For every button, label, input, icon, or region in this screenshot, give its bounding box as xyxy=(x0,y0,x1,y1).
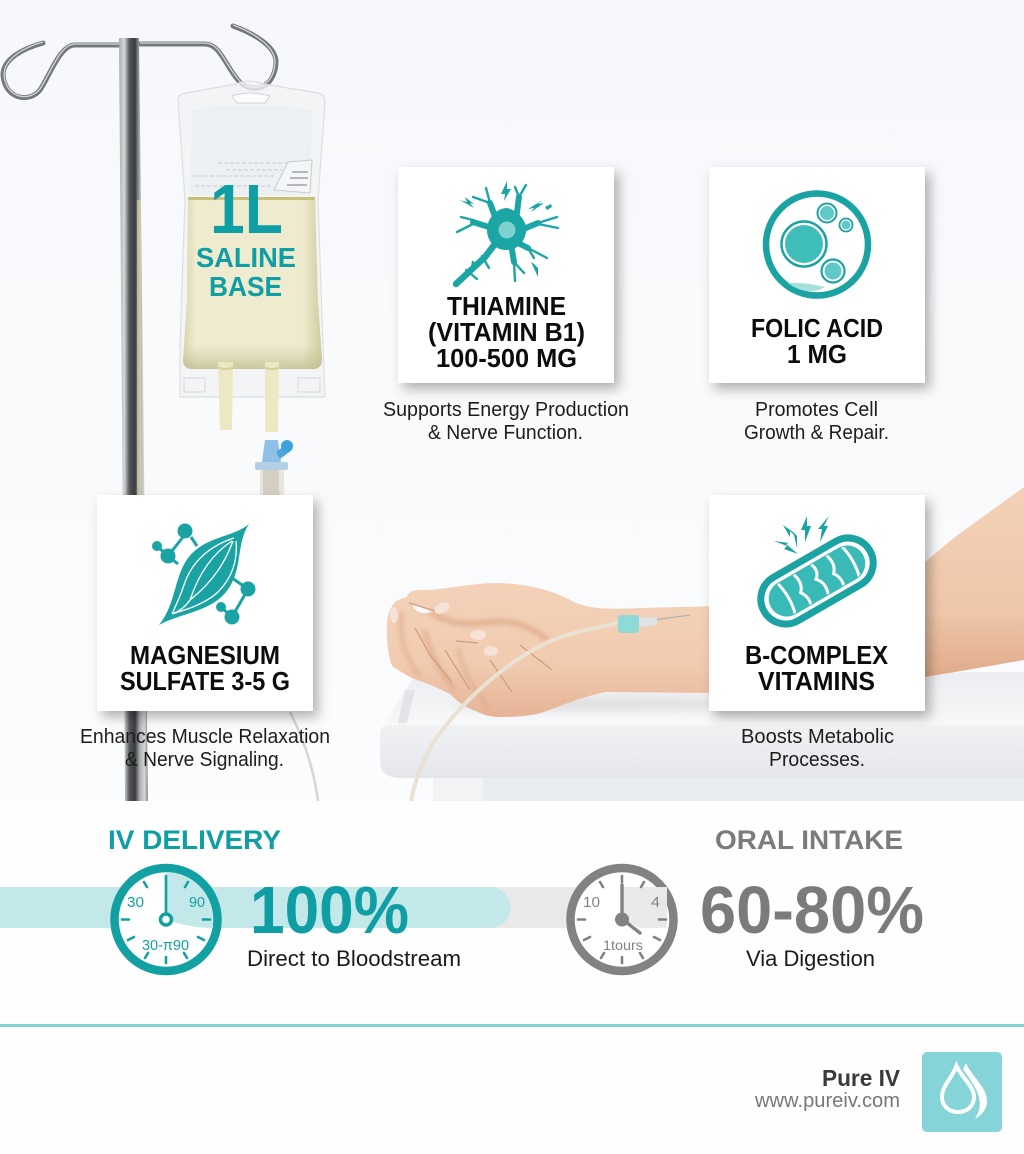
description: b-complex xyxy=(741,726,894,771)
icon: oral clock: 10 xyxy=(583,895,600,911)
bag volume label: SALINE xyxy=(196,242,296,273)
icon: oral clock: 1tours xyxy=(603,938,643,953)
description: folic acid: Growth & Repair. xyxy=(744,422,889,444)
hand and wrist xyxy=(387,583,720,717)
photo background xyxy=(0,0,1024,801)
icon: mitochondrion xyxy=(757,516,877,628)
icon: oral clock: 4 xyxy=(651,895,660,911)
icon: cell xyxy=(766,194,868,296)
footer brand xyxy=(754,1052,1002,1132)
energy bolts xyxy=(774,516,829,554)
description: thiamine: & Nerve Function. xyxy=(428,422,583,444)
description: b-complex: Boosts Metabolic xyxy=(741,726,894,748)
IV tube lower xyxy=(290,712,318,801)
caption: via digestion: Via Digestion xyxy=(746,946,875,971)
fingernails xyxy=(390,600,498,656)
brand name: Pure IV xyxy=(822,1065,900,1091)
card: b-complex: B-COMPLEX xyxy=(745,640,889,670)
icon: iv clock: 30-π90 xyxy=(142,938,189,954)
caption: direct to bloodstream: Direct to Bloodstream xyxy=(247,946,461,971)
card: thiamine: 100-500 MG xyxy=(436,343,577,373)
bag ports xyxy=(212,362,286,432)
card: b-complex xyxy=(709,495,925,711)
icon: iv clock: 30 xyxy=(127,895,144,911)
card: thiamine: THIAMINE xyxy=(447,291,566,321)
nerve sparks xyxy=(460,181,552,277)
website: www.pureiv.com xyxy=(754,1090,900,1112)
card: b-complex: VITAMINS xyxy=(758,666,875,696)
card: folic acid: FOLIC ACID xyxy=(751,313,883,343)
bag volume label: 1L xyxy=(210,170,283,248)
description: b-complex: Processes. xyxy=(769,749,865,771)
icon: iv clock xyxy=(114,868,218,971)
description: thiamine xyxy=(383,399,629,444)
icon: neuron xyxy=(456,181,558,284)
description: magnesium: Enhances Muscle Relaxation xyxy=(80,726,330,748)
card: folic acid xyxy=(709,167,925,383)
comparison section xyxy=(0,801,1024,1154)
infusion tube and catheter xyxy=(411,615,690,801)
drip connector xyxy=(255,440,293,496)
heading: iv delivery: IV DELIVERY xyxy=(108,825,281,855)
description: folic acid: Promotes Cell xyxy=(755,399,878,421)
stat: 100%: 100% xyxy=(250,873,409,948)
IV pole with hooks xyxy=(3,25,276,801)
IV bag xyxy=(178,81,325,432)
description: magnesium: & Nerve Signaling. xyxy=(125,749,284,771)
card: magnesium xyxy=(97,495,313,711)
absorption bars xyxy=(0,887,667,928)
icon: muscle with molecules xyxy=(152,524,256,625)
card: magnesium: MAGNESIUM xyxy=(130,640,280,670)
table xyxy=(380,672,1024,801)
divider xyxy=(0,1024,1024,1027)
finger creases xyxy=(409,603,552,692)
description: magnesium xyxy=(80,726,330,771)
card: folic acid: 1 MG xyxy=(787,339,847,369)
description: folic acid xyxy=(744,399,889,444)
thumb gap xyxy=(412,604,436,613)
card: thiamine: (VITAMIN B1) xyxy=(428,317,585,347)
card: magnesium: SULFATE 3-5 G xyxy=(120,666,290,696)
icon: oral clock xyxy=(570,868,674,971)
icon: iv clock: 90 xyxy=(189,895,205,911)
description: thiamine: Supports Energy Production xyxy=(383,399,629,421)
bag volume label xyxy=(196,170,296,302)
bag volume label: BASE xyxy=(209,271,282,302)
logo: water drop xyxy=(922,1052,1002,1132)
stat: 60-80%: 60-80% xyxy=(700,873,924,948)
card: thiamine xyxy=(398,167,614,383)
palm shading xyxy=(401,612,548,708)
heading: oral intake: ORAL INTAKE xyxy=(715,825,903,855)
forearm right xyxy=(925,487,1024,677)
